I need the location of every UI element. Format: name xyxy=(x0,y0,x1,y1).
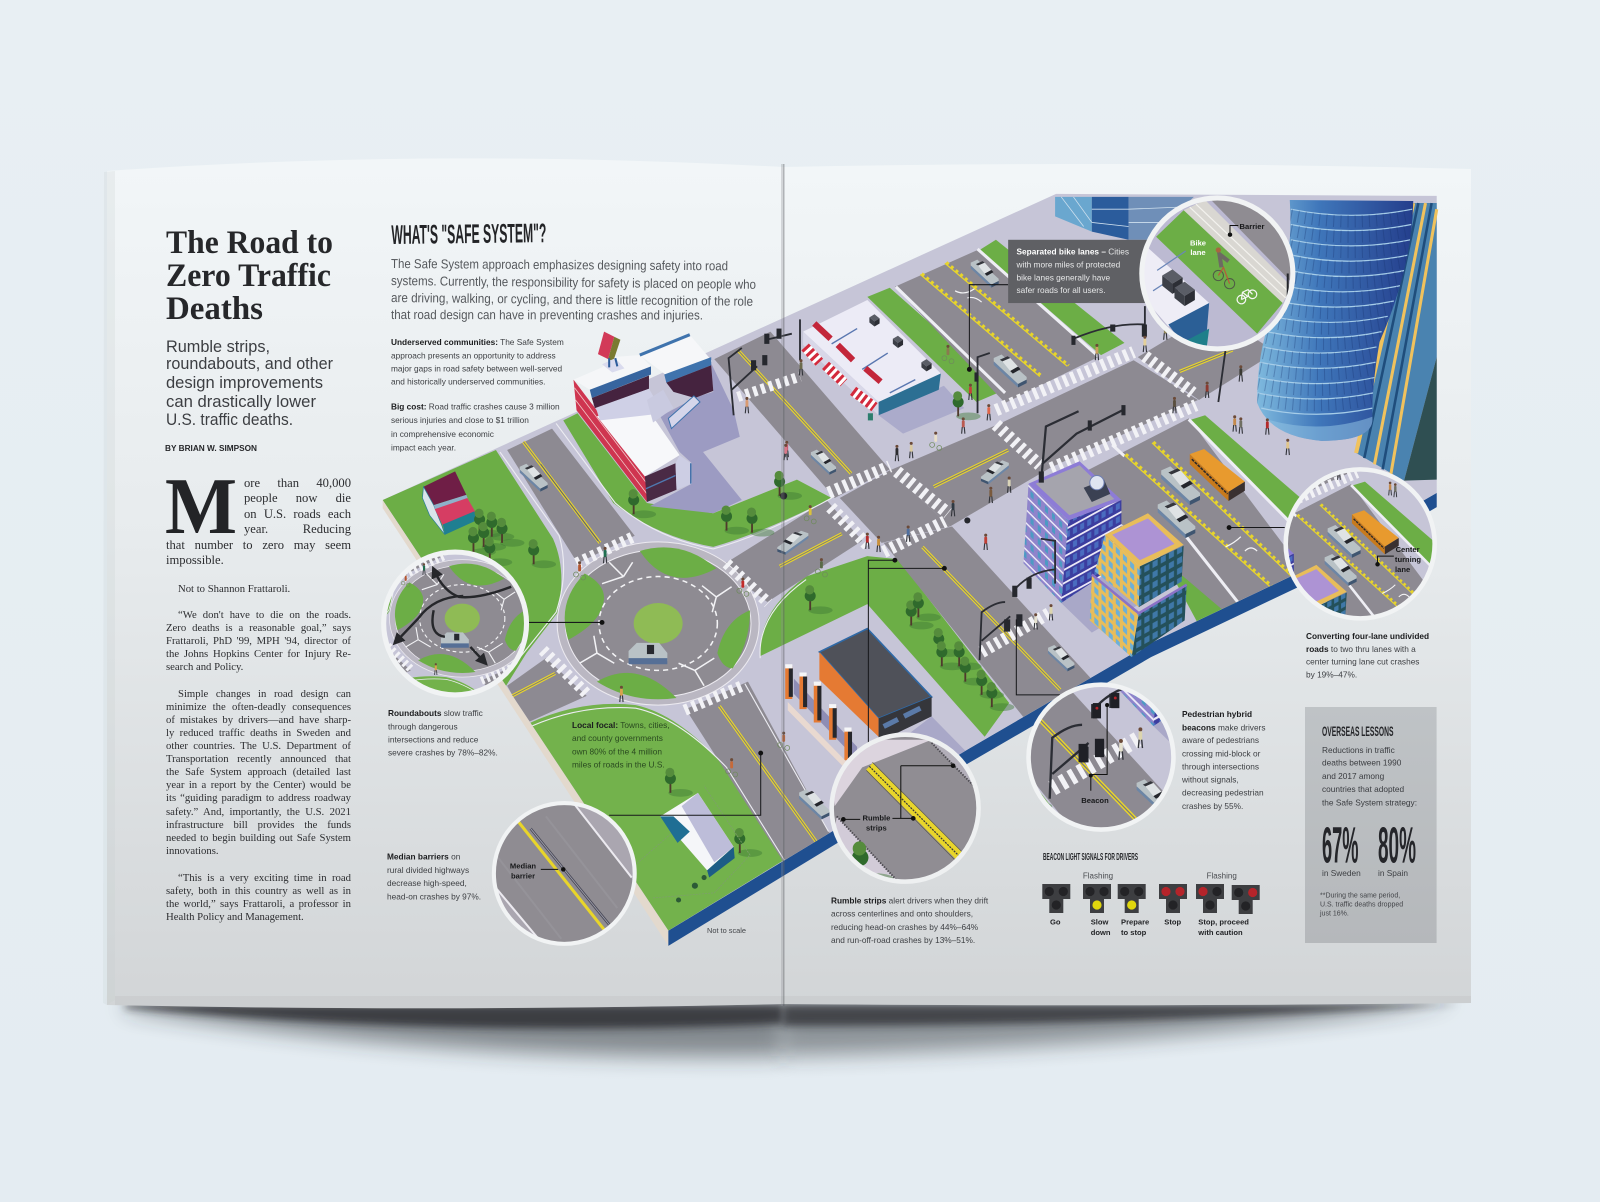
grey callout panel: separated bike lanes xyxy=(1008,240,1147,303)
caption: rumble strips: and run-off-road crashes by 13%–51%. xyxy=(831,935,975,945)
book shadow xyxy=(125,1003,1460,1057)
article opening paragraph: impossible. xyxy=(166,553,224,567)
beacon signal labels: to stop xyxy=(1121,928,1147,937)
overseas body text: and 2017 among xyxy=(1322,771,1385,781)
subtitle: can drastically lower xyxy=(166,393,317,411)
caption: local focal: miles of roads in the U.S. xyxy=(572,760,665,770)
inset labels: barrier xyxy=(511,872,535,880)
article paragraph: simple changes: minimize the often-deadly consequences xyxy=(166,701,351,713)
article paragraph: simple changes: needed to begin building out Safe System xyxy=(166,832,351,844)
subtitle: design improvements xyxy=(166,374,323,392)
caption: big cost: impact each year. xyxy=(391,443,456,453)
article paragraph: we don't have to die: Frattaroli, PhD '99, MPH '94, director of xyxy=(166,635,351,647)
inset circle: bike lane xyxy=(1138,194,1296,352)
caption: underserved communities: approach presents an opportunity to address xyxy=(391,351,556,361)
overseas lessons panel: OVERSEAS LESSONS xyxy=(1322,723,1394,739)
magazine pages xyxy=(103,158,1471,1008)
article paragraph: we don't have to die xyxy=(166,609,351,673)
stat: 80% in Spain xyxy=(1378,817,1416,878)
caption text: separated bike lanes: with more miles of protected xyxy=(1016,260,1121,270)
caption: roundabouts: through dangerous xyxy=(388,721,458,731)
stat: 67% in Sweden: in Sweden xyxy=(1322,868,1361,878)
article paragraph: simple changes: Simple changes in road design can xyxy=(178,688,351,700)
caption: local focal: and county governments xyxy=(572,733,663,743)
overseas footnote: **During the same period, xyxy=(1320,892,1400,900)
article paragraph: simple changes: ly reduced traffic deaths in Sweden and xyxy=(166,727,351,739)
beacon signal: slow down xyxy=(1083,884,1111,913)
article opening paragraph: year. Reducing xyxy=(244,522,351,536)
flashing labels: Flashing xyxy=(1083,872,1113,880)
overseas body text: countries that adopted xyxy=(1322,784,1404,794)
headline: The Road to xyxy=(166,225,333,261)
beacon signal labels xyxy=(1050,918,1249,937)
intro paragraph: The Safe System approach emphasizes designing safety into road xyxy=(391,256,728,273)
caption: local focal: own 80% of the 4 million xyxy=(572,746,662,756)
article paragraph: closing quote: “This is a very exciting time in road xyxy=(178,872,351,884)
caption: rumble strips: reducing head-on crashes by 44%–64% xyxy=(831,922,979,932)
inset circle: roundabout xyxy=(381,550,530,698)
inset circle: pedestrian beacon xyxy=(1026,682,1176,832)
caption: converting four-lane roads: by 19%–47%. xyxy=(1306,669,1357,679)
inset circle: median barrier xyxy=(492,801,637,946)
caption: roundabouts: Roundabouts slow traffic xyxy=(388,708,483,718)
cyclist xyxy=(1213,247,1235,289)
overseas body text: deaths between 1990 xyxy=(1322,758,1402,768)
article paragraph: we don't have to die: search and Policy. xyxy=(166,661,243,673)
caption text: separated bike lanes: Cities xyxy=(1106,247,1129,257)
stat: 80% in Spain: in Spain xyxy=(1378,868,1408,878)
intro paragraph xyxy=(391,256,756,323)
caption: underserved communities: Underserved communities: The Safe System xyxy=(391,337,564,347)
caption: converting four-lane roads: Converting four-lane undivided xyxy=(1306,631,1429,641)
headline: Deaths xyxy=(166,291,263,327)
caption: median barriers: head-on crashes by 97%. xyxy=(387,891,481,901)
caption: pedestrian hybrid beacons: crossing mid-block or xyxy=(1182,748,1261,758)
caption: median barriers: rural divided highways xyxy=(387,865,469,875)
article paragraph: closing quote: the world,” says Frattaroli, a professor in xyxy=(166,898,351,910)
beacon signal: prepare to stop xyxy=(1118,884,1146,913)
caption: big cost: Big cost: Road traffic crashes cause 3 million xyxy=(391,402,560,412)
article opening paragraph xyxy=(166,476,351,567)
beacon signal labels: with caution xyxy=(1197,928,1243,937)
overseas footnote: U.S. traffic deaths dropped xyxy=(1320,902,1403,908)
caption text: separated bike lanes: Separated bike lanes – xyxy=(1016,247,1106,257)
not to scale note: Not to scale xyxy=(707,926,746,935)
beacon signal: go xyxy=(1042,884,1070,913)
article paragraph: closing quote xyxy=(166,872,351,923)
inset labels: Barrier xyxy=(1240,222,1264,231)
beacon signal: stop xyxy=(1159,884,1187,913)
article paragraph: simple changes: Transportation recently announced that xyxy=(166,753,351,765)
article paragraph: simple changes: of mistakes by drivers—and have sharp- xyxy=(166,714,351,726)
overseas lessons panel: 67% xyxy=(1322,817,1358,874)
beacon signal labels: Go xyxy=(1050,918,1061,926)
subtitle: Rumble strips, xyxy=(166,338,270,356)
article paragraph: simple changes: the Safe System approach (detailed last xyxy=(166,766,351,778)
caption: big cost: serious injuries and close to $1 trillion xyxy=(391,415,529,425)
inset labels: Rumble xyxy=(862,814,890,822)
text: BEACON LIGHT SIGNALS FOR DRIVERS xyxy=(1043,851,1138,863)
subtitle: U.S. traffic deaths. xyxy=(166,411,293,429)
inset labels: lane xyxy=(1395,565,1410,574)
beacon signal labels: Stop xyxy=(1164,918,1182,926)
caption: roundabouts: intersections and reduce xyxy=(388,734,479,744)
caption: median barriers: decrease high-speed, xyxy=(387,878,467,888)
beacon signal labels: Stop, proceed xyxy=(1198,918,1249,926)
beacon signal: stop, proceed right xyxy=(1232,885,1260,914)
drop cap: M xyxy=(165,463,237,551)
isometric street illustration xyxy=(381,194,1438,946)
inset circle: rumble strips xyxy=(827,735,985,888)
caption: underserved communities: major gaps in road safety between well-served xyxy=(391,364,562,374)
spine fold xyxy=(781,164,784,1006)
inset labels: Beacon xyxy=(1081,796,1109,805)
article paragraph: simple changes: infrastructure bill provides the funds xyxy=(166,819,351,831)
inset labels: turning xyxy=(1395,555,1421,564)
caption: pedestrian hybrid beacons: through intersections xyxy=(1182,762,1259,772)
caption: pedestrian hybrid beacons: crashes by 55%. xyxy=(1182,801,1243,811)
caption: rumble strips: across centerlines and onto shoulders, xyxy=(831,908,973,918)
article paragraph: simple changes: safety.” And, importantly, the U.S. 2021 xyxy=(166,806,351,818)
caption: pedestrian hybrid beacons: aware of pedestrians xyxy=(1182,735,1259,745)
caption: big cost: in comprehensive economic xyxy=(391,429,494,439)
caption text: separated bike lanes: safer roads for all users. xyxy=(1016,285,1106,295)
caption: converting four-lane roads: center turning lane cut crashes xyxy=(1306,657,1419,667)
article paragraph: simple changes: its “guiding paradigm to address roadway xyxy=(166,792,351,804)
article opening paragraph: that number to zero may seem xyxy=(166,538,351,552)
article opening paragraph: people now die xyxy=(244,491,351,505)
caption: pedestrian hybrid beacons: beacons make drivers xyxy=(1182,722,1265,732)
caption: local focal: Local focal: Towns, cities, xyxy=(572,720,670,730)
connector lines and dots xyxy=(528,285,1285,815)
beacon signal labels: down xyxy=(1091,928,1111,937)
article opening paragraph: ore than 40,000 xyxy=(244,476,351,490)
article paragraph: closing quote: Health Policy and Management. xyxy=(166,911,304,923)
byline: BY BRIAN W. SIMPSON xyxy=(165,444,257,453)
beacon signal labels: Slow xyxy=(1091,918,1109,926)
overseas lessons panel xyxy=(1305,707,1437,943)
headline: Zero Traffic xyxy=(166,258,331,294)
flashing labels: Flashing xyxy=(1207,872,1237,880)
inset labels: strips xyxy=(866,824,887,832)
beacon signal labels: Prepare xyxy=(1121,918,1149,926)
caption: underserved communities: and historically underserved communities. xyxy=(391,376,546,386)
caption: pedestrian hybrid beacons: Pedestrian hybrid xyxy=(1182,709,1252,719)
article paragraph: closing quote: safety, both in this country as well as in xyxy=(166,885,351,897)
inset labels: Median xyxy=(510,862,536,870)
inset labels: lane xyxy=(1190,248,1206,257)
caption: median barriers: Median barriers on xyxy=(387,852,460,862)
overseas lessons panel: 80% xyxy=(1378,817,1416,874)
caption: pedestrian hybrid beacons: without signals, xyxy=(1181,774,1239,784)
overseas footnote: just 16%. xyxy=(1319,910,1349,918)
flashing labels xyxy=(1083,872,1237,880)
article paragraph: simple changes: other countries. The U.S. Department of xyxy=(166,740,351,752)
inset labels: Bike xyxy=(1190,238,1206,248)
article paragraph: simple changes: year in a report by the Center) would be xyxy=(166,779,351,791)
article opening paragraph: on U.S. roads each xyxy=(244,507,351,521)
beacon signal: stop, proceed left xyxy=(1196,884,1224,913)
article paragraph: simple changes: innovations. xyxy=(166,845,219,857)
overseas body text: the Safe System strategy: xyxy=(1322,797,1417,807)
inset circle: center turning lane xyxy=(1283,467,1437,620)
article paragraph: we don't have to die: “We don't have to die on the roads. xyxy=(178,609,351,621)
subtitle: roundabouts, and other xyxy=(166,355,334,373)
caption: pedestrian hybrid beacons: decreasing pedestrian xyxy=(1182,788,1264,798)
caption text: separated bike lanes: bike lanes generally have xyxy=(1016,272,1111,282)
caption: converting four-lane roads: roads to two thru lanes with a xyxy=(1306,644,1416,654)
article paragraph: not to Shannon Frattaroli: Not to Shannon Frattaroli. xyxy=(178,582,290,594)
intro paragraph: are driving, walking, or cycling, and there is little recognition of the role xyxy=(391,290,753,309)
intro paragraph: that road design can have in preventing crashes and injuries. xyxy=(391,307,703,323)
subtitle xyxy=(166,338,334,429)
article paragraph: we don't have to die: the Johns Hopkins Center for Injury Re- xyxy=(166,648,351,660)
inset labels: Center xyxy=(1396,545,1420,554)
article paragraph: simple changes xyxy=(166,688,351,857)
caption: roundabouts: severe crashes by 78%–82%. xyxy=(388,748,498,758)
inset labels xyxy=(510,222,1421,880)
headline xyxy=(166,225,333,327)
text: WHAT'S "SAFE SYSTEM"? xyxy=(391,218,547,250)
caption: rumble strips: Rumble strips alert drivers when they drift xyxy=(831,896,988,906)
article paragraph: we don't have to die: Zero deaths is a reasonable goal,” says xyxy=(166,622,351,634)
intro paragraph: systems. Currently, the responsibility for safety is placed on people who xyxy=(391,273,756,292)
overseas body text: Reductions in traffic xyxy=(1322,745,1395,755)
stat: 67% in Sweden xyxy=(1322,817,1361,878)
